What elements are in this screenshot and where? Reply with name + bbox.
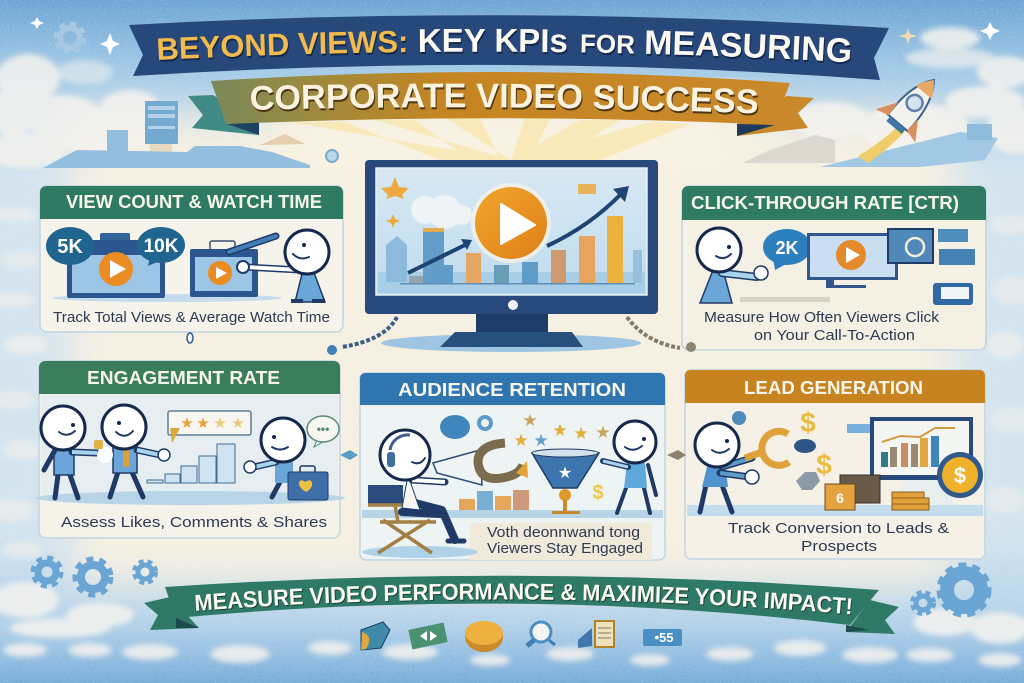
bubble: 5K: [46, 227, 94, 265]
icon: arrows tile: [408, 622, 448, 650]
bar chart: [386, 216, 642, 284]
icon: funnel trophy: [532, 449, 599, 514]
icon: dollars: $: [816, 449, 832, 480]
icon: wallets: [825, 475, 880, 510]
footer ribbon: [144, 576, 899, 634]
panel caption: Voth deonnwand tong: [487, 525, 640, 541]
icon row bottom: [361, 621, 682, 652]
icon: notepad: [578, 621, 614, 648]
icon: dollars: [800, 407, 832, 480]
panel caption: [487, 525, 643, 557]
bubble: 5K: 5K: [57, 236, 83, 258]
panel caption: [728, 521, 949, 555]
panel header: [39, 361, 340, 394]
bubble: 2K: 2K: [775, 238, 799, 258]
heading: VIEW COUNT & WATCH TIME: [66, 192, 322, 212]
heading: CLICK-THROUGH RATE [CTR): [691, 193, 959, 213]
chart monitor: [870, 417, 973, 505]
figure: clicker: [697, 228, 768, 303]
rating box: ★: [196, 415, 210, 432]
title ribbon bottom: [188, 72, 814, 136]
bubble: 10K: [137, 227, 185, 266]
icon: cloud and flower: [440, 415, 491, 439]
rating box: ★: [231, 415, 245, 432]
title line two: CORPORATE VIDEO SUCCESS: [251, 84, 758, 116]
sunburst rays: [290, 118, 690, 160]
figure: person two: [94, 405, 170, 497]
city skyline left: [43, 101, 338, 168]
icon: monitor: [807, 233, 898, 288]
icon: gears bottom left: [33, 558, 156, 595]
connector right: [627, 317, 680, 348]
rating box: ★: [180, 415, 194, 432]
icon: funnel trophy: ★: [558, 465, 572, 482]
icon: sparkles: [30, 17, 1000, 55]
rating box: [168, 411, 251, 443]
panel header: [360, 373, 665, 405]
panel caption: on Your Call-To-Action: [754, 328, 915, 344]
icon: dollar coin: $: [954, 463, 966, 488]
city skyline right: [742, 124, 998, 167]
figure: person one: [41, 406, 97, 498]
panel header: [682, 186, 986, 220]
figure: person three: [244, 418, 305, 497]
panel caption: Track Conversion to Leads &: [728, 521, 949, 537]
monitor: [365, 160, 658, 352]
icon: number tile: •55: [654, 630, 674, 645]
heading: ENGAGEMENT RATE: [87, 368, 280, 388]
icon: gears bottom right: [912, 565, 989, 615]
panel caption: Prospects: [801, 539, 877, 555]
title line one: FOR: [582, 34, 636, 56]
panel caption: Track Total Views & Average Watch Time: [53, 310, 330, 326]
icon: small tokens: [732, 411, 820, 490]
icon: dollars: $: [800, 407, 816, 438]
icon: video window: [190, 236, 276, 297]
icon: rocket: [858, 63, 954, 163]
icon: magnifier: [527, 622, 555, 646]
title line one: [158, 28, 852, 64]
panel caption: Viewers Stay Engaged: [487, 541, 643, 557]
icon: quote tile: [361, 622, 390, 650]
icon: stars: ★: [552, 421, 568, 440]
monitor screen: [376, 168, 647, 295]
figure: director in chair: [362, 430, 478, 558]
figure: lead hunter: [695, 423, 759, 512]
icon: stars: ★: [522, 411, 538, 430]
connector left: [342, 317, 397, 347]
icon: stars on screen: [381, 177, 596, 228]
icon: video folder: [67, 233, 165, 298]
icon: stars: ★: [595, 423, 611, 442]
arrow right: [547, 186, 629, 246]
icon: arrow into chart: [847, 424, 893, 433]
icon: briefcase: [288, 466, 328, 500]
arrow left: [408, 239, 472, 273]
bubble: 10K: 10K: [144, 236, 179, 257]
bubble: 2K: [763, 229, 811, 270]
icon: speech bubble: •••: [317, 422, 329, 436]
panel caption: Measure How Often Viewers Click: [704, 310, 940, 326]
panel: lead generation: [685, 370, 985, 559]
icon: coin stack: [892, 492, 929, 510]
panel header: [685, 370, 985, 403]
step chart: [147, 444, 235, 483]
panel: audience retention: [360, 373, 665, 560]
panel: engagement rate: [35, 361, 345, 538]
icon: dollar: $: [592, 482, 604, 504]
icon: stars: ★: [513, 431, 529, 450]
title line one: KEY KPIs: [420, 28, 568, 54]
panel caption: [704, 310, 940, 344]
bars: [459, 490, 529, 510]
icon: play button: [471, 183, 551, 263]
title line one: BEYOND VIEWS:: [158, 30, 406, 62]
icon: stars: ★: [533, 431, 549, 450]
icon: number tile: [643, 629, 682, 646]
rating box: ★: [213, 415, 227, 432]
icon: speech bubble: [307, 416, 339, 447]
icon: gold coin: [465, 621, 503, 652]
icon: dollar coin: [937, 452, 983, 498]
icon: magnet wrench: [745, 431, 789, 465]
icon: ui cards: [888, 229, 975, 305]
heading: LEAD GENERATION: [744, 378, 923, 398]
figure: viewer: [603, 421, 656, 513]
icon: stars: [513, 411, 611, 450]
caption backing: [470, 523, 652, 560]
icon: megaphone: [433, 443, 528, 485]
panel: click-through rate: [682, 186, 986, 350]
icon: stars: ★: [573, 424, 589, 443]
icon: gear top left: [56, 24, 84, 52]
icon: wallets: 6: [836, 490, 844, 506]
panel header: [40, 186, 343, 219]
connector dots: [187, 333, 696, 460]
panel: view count and watch time: [40, 186, 343, 332]
title ribbon top: [129, 15, 889, 80]
panel caption: Assess Likes, Comments & Shares: [61, 515, 327, 531]
figure: presenter: [237, 230, 329, 303]
heading: AUDIENCE RETENTION: [398, 380, 626, 400]
title line one: MEASURING: [646, 30, 852, 64]
footer slogan: MEASURE VIDEO PERFORMANCE & MAXIMIZE YOUR IMPACT!: [195, 584, 852, 616]
